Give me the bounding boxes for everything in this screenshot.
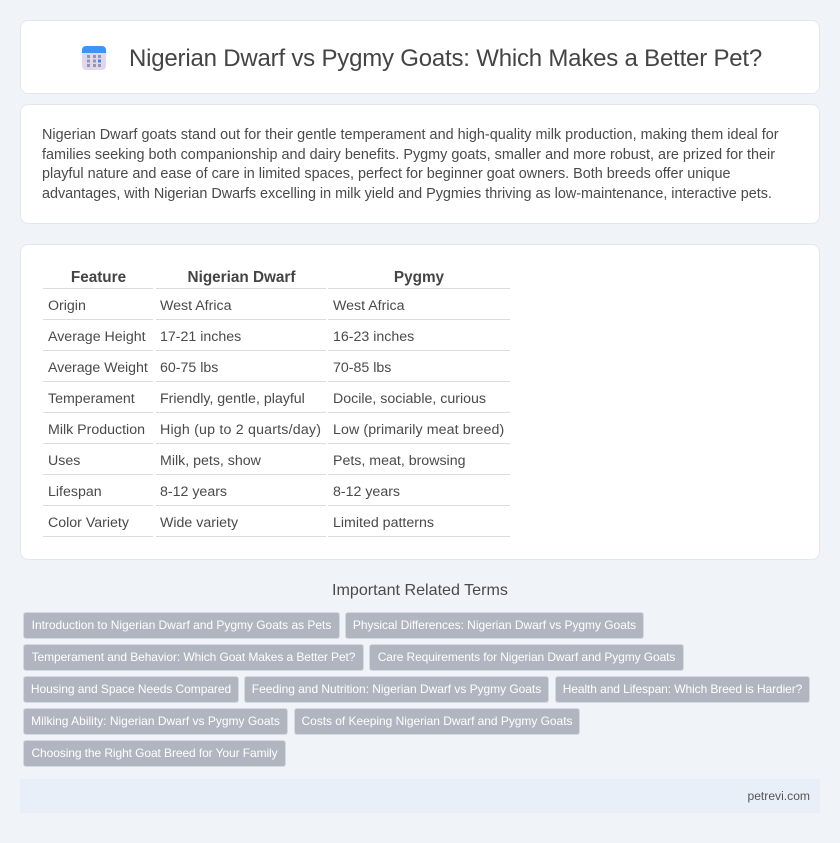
row: lifespan: 8-12 years xyxy=(160,484,227,500)
row: lifespan xyxy=(48,484,400,500)
row: average weight: Average Weight xyxy=(48,360,148,376)
tag: Health and Lifespan: Which Breed is Hardier? xyxy=(563,682,802,696)
intro paragraph: Nigerian Dwarf goats stand out for their gentle temperament and high-quality milk production, making them ideal for xyxy=(42,127,779,143)
intro paragraph: playful nature and ease of care in limited spaces, perfect for beginner goat owners. Both breeds offer unique xyxy=(42,166,731,182)
row: temperament: Temperament xyxy=(48,391,135,407)
row: color variety: Color Variety xyxy=(48,515,129,531)
icon: calendar xyxy=(82,46,106,70)
tag: Physical Differences: Nigerian Dwarf vs Pygmy Goats xyxy=(353,618,636,632)
intro paragraph: families seeking both companionship and dairy benefits. Pygmy goats, smaller and more robust, are prized for their xyxy=(42,147,775,163)
row: milk production: Low (primarily meat breed) xyxy=(333,422,504,438)
row: origin: West Africa xyxy=(333,298,404,314)
row: milk production: High (up to 2 quarts/day) xyxy=(160,422,321,438)
row: temperament: Docile, sociable, curious xyxy=(333,391,486,407)
tag xyxy=(23,708,288,735)
row: lifespan: Lifespan xyxy=(48,484,102,500)
row: color variety xyxy=(48,515,434,531)
tag xyxy=(23,740,286,767)
tag xyxy=(244,676,549,703)
footer xyxy=(20,779,820,813)
tag xyxy=(23,644,364,671)
tag: Housing and Space Needs Compared xyxy=(31,682,231,696)
row: average weight xyxy=(48,360,391,376)
row: average weight: 60-75 lbs xyxy=(160,360,218,376)
row: average height: 16-23 inches xyxy=(333,329,414,345)
tag: Milking Ability: Nigerian Dwarf vs Pygmy Goats xyxy=(31,714,280,728)
row: uses: Pets, meat, browsing xyxy=(333,453,465,469)
row: temperament: Friendly, gentle, playful xyxy=(160,391,305,407)
tag: Choosing the Right Goat Breed for Your Family xyxy=(31,746,278,760)
row: color variety: Wide variety xyxy=(160,515,238,531)
tag xyxy=(23,676,239,703)
row: uses: Milk, pets, show xyxy=(160,453,261,469)
tag: Care Requirements for Nigerian Dwarf and Pygmy Goats xyxy=(378,650,675,664)
tag: Introduction to Nigerian Dwarf and Pygmy Goats as Pets xyxy=(32,618,331,632)
table header: Pygmy xyxy=(394,269,444,286)
tag xyxy=(369,644,684,671)
title: Nigerian Dwarf vs Pygmy Goats: Which Makes a Better Pet? xyxy=(129,45,762,72)
tag: Temperament and Behavior: Which Goat Makes a Better Pet? xyxy=(32,650,355,664)
footer site name: petrevi.com xyxy=(747,789,810,803)
tag xyxy=(294,708,580,735)
row: temperament xyxy=(48,391,486,407)
tag xyxy=(23,612,340,639)
tag: Feeding and Nutrition: Nigerian Dwarf vs Pygmy Goats xyxy=(252,682,541,696)
panel: header xyxy=(20,20,820,94)
panel: introduction text xyxy=(20,104,820,224)
row: origin: Origin xyxy=(48,298,86,314)
row: color variety: Limited patterns xyxy=(333,515,434,531)
row: origin xyxy=(48,298,404,314)
row: origin: West Africa xyxy=(160,298,231,314)
panel: comparison table xyxy=(20,244,820,560)
row: average height: Average Height xyxy=(48,329,146,345)
tag: Costs of Keeping Nigerian Dwarf and Pygmy Goats xyxy=(302,714,572,728)
intro paragraph: advantages, with Nigerian Dwarfs excelling in milk yield and Pygmies thriving as low-maintenance, interactive pets. xyxy=(42,186,772,202)
row: uses xyxy=(48,453,465,469)
table header: Feature xyxy=(71,269,126,286)
row: average weight: 70-85 lbs xyxy=(333,360,391,376)
row: lifespan: 8-12 years xyxy=(333,484,400,500)
table header xyxy=(71,269,444,286)
row: average height xyxy=(48,329,414,345)
intro paragraph xyxy=(42,127,779,202)
tag xyxy=(555,676,810,703)
table header: Nigerian Dwarf xyxy=(188,269,295,286)
row: average height: 17-21 inches xyxy=(160,329,241,345)
row: uses: Uses xyxy=(48,453,80,469)
tag xyxy=(345,612,644,639)
heading: related terms: Important Related Terms xyxy=(332,581,508,599)
row: milk production: Milk Production xyxy=(48,422,145,438)
row: milk production xyxy=(48,422,504,438)
related term tags xyxy=(23,612,810,767)
